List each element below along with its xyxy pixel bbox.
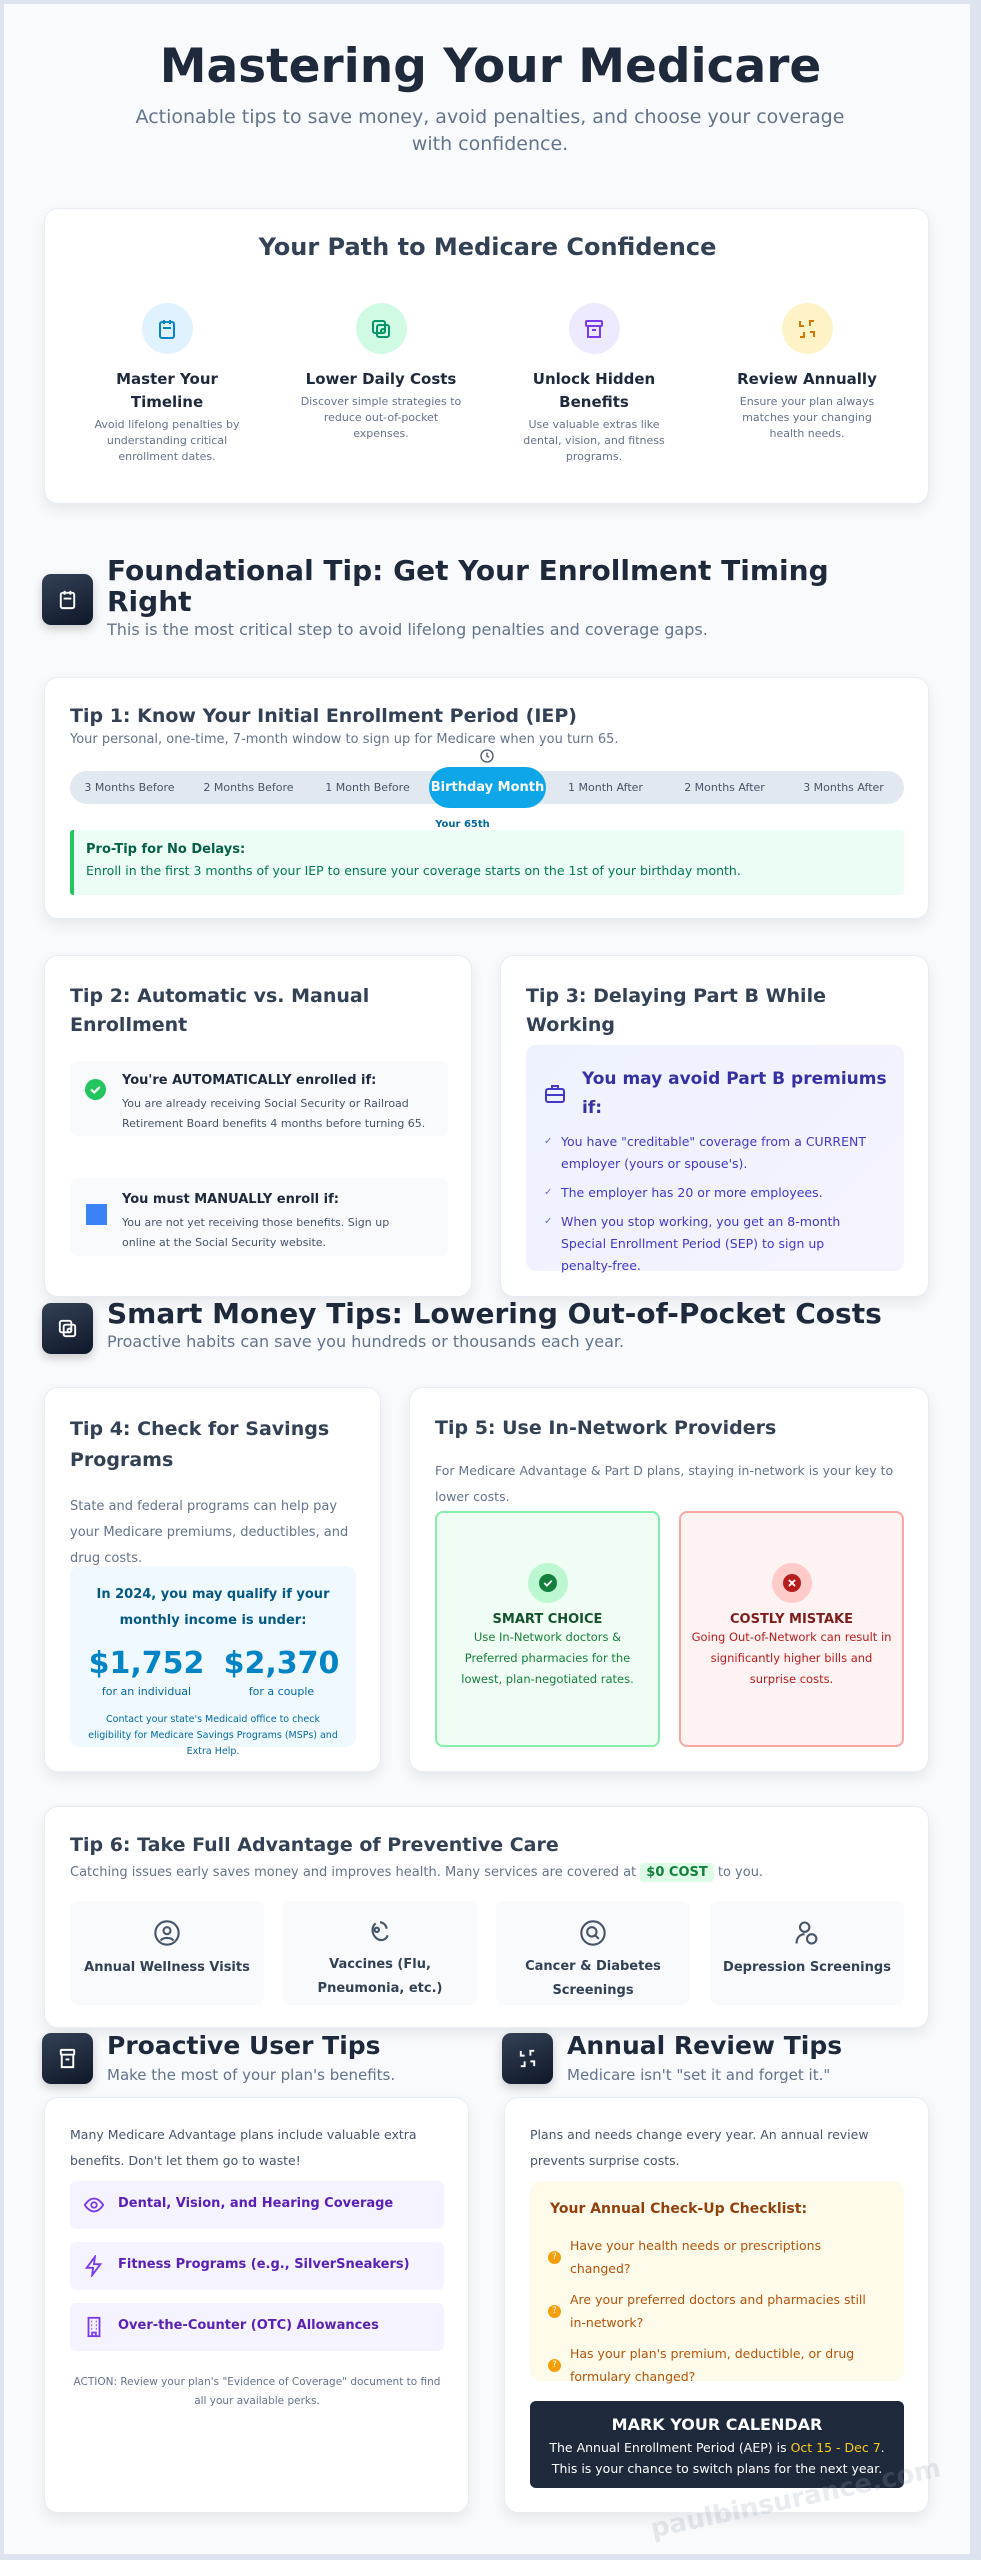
section header: foundational: This is the most critical step to avoid lifelong penalties and coverage gaps.: [107, 620, 708, 639]
icon: clock: [480, 749, 494, 763]
costly mistake: COSTLY MISTAKE: [730, 1612, 853, 1627]
item: costs: Discover simple strategies to: [301, 395, 461, 408]
panel: tip 5: For Medicare Advantage & Part D plans, staying in-network is your key to lower costs.: [435, 1463, 893, 1504]
timeline: 2 Months After: [684, 781, 765, 794]
panel: tip 1: [44, 677, 929, 919]
panel: tip 2: Tip 2: Automatic vs. Manual Enrollment: [70, 985, 369, 1036]
checklist: Your Annual Check-Up Checklist:: [550, 2201, 807, 2217]
icon: calendar: [42, 574, 93, 625]
timeline: 2 Months Before: [203, 781, 294, 794]
manual box: You are not yet receiving those benefits. Sign up online at the Social Security website.: [122, 1216, 389, 1249]
icon: arrows: [502, 2033, 553, 2084]
item: timeline: understanding critical: [107, 434, 227, 447]
panel: tip 1: Tip 1: Know Your Initial Enrollment Period (IEP): [70, 705, 577, 727]
callout: avoid premiums: ✓: [544, 1187, 552, 1198]
service: depression: [710, 1901, 904, 2005]
icon: check: [528, 1563, 568, 1603]
title: Mastering Your Medicare: [160, 39, 821, 94]
item: review: health needs.: [769, 427, 845, 440]
icon: calendar: [142, 303, 192, 354]
income box: $2,370: [224, 1646, 339, 1681]
panel: tip 6: [44, 1806, 929, 2028]
section header: foundational: Foundational Tip: Get Your Enrollment Timing Right: [107, 554, 829, 618]
callout: avoid premiums: [526, 1045, 904, 1271]
income box: for an individual: [102, 1685, 191, 1698]
panel: tip 5: [409, 1387, 929, 1772]
item: timeline: Timeline: [131, 393, 203, 411]
perk: fitness: [70, 2242, 444, 2290]
service: screenings: Cancer & Diabetes: [525, 1959, 661, 1974]
item: timeline: Avoid lifelong penalties by: [94, 418, 240, 431]
birthday month pill: [429, 767, 546, 808]
panel: tip 3: [500, 955, 929, 1297]
panel: tip 6: Tip 6: Take Full Advantage of Preventive Care: [70, 1834, 559, 1856]
icon: box: [568, 303, 620, 354]
item: costs: Lower Daily Costs: [306, 370, 456, 388]
pro-tip callout: Enroll in the first 3 months of your IEP to ensure your coverage starts on the 1st of your birthday month.: [86, 863, 741, 878]
item: timeline: Master Your: [116, 370, 218, 388]
income box: In 2024, you may qualify if your: [96, 1587, 329, 1602]
callout: avoid premiums: ✓: [544, 1136, 552, 1147]
icon: briefcase: [545, 1085, 565, 1103]
costly mistake: [679, 1511, 904, 1747]
perk: dental: [70, 2181, 444, 2229]
timeline: [70, 771, 904, 804]
icon: x: [772, 1563, 812, 1603]
smart choice: Use In-Network doctors & Preferred pharmacies for the lowest, plan-negotiated rates.: [461, 1630, 634, 1686]
timeline: 3 Months After: [803, 781, 884, 794]
pro-tip callout: [70, 830, 904, 895]
item: review: matches your changing: [742, 411, 872, 424]
heading: Your Path to Medicare Confidence: [259, 233, 716, 261]
income box: for a couple: [249, 1685, 314, 1698]
section header: proactive: Proactive User Tips: [107, 2031, 381, 2060]
birthday month pill: Birthday Month: [431, 780, 544, 795]
panel: tip 1: Your 65th: [435, 819, 490, 830]
service: depression: Depression Screenings: [723, 1960, 891, 1975]
item: review: Review Annually: [737, 370, 877, 388]
item: benefits: dental, vision, and fitness: [523, 434, 665, 447]
item: review: Ensure your plan always: [740, 395, 874, 408]
watermark: paulbinsurance.com: [648, 2454, 944, 2544]
service: vaccines: Vaccines (Flu,: [329, 1957, 431, 1972]
service: screenings: [496, 1901, 690, 2005]
automatic box: [70, 1061, 448, 1136]
item: timeline: [94, 303, 240, 463]
checklist: ?: [552, 2360, 557, 2370]
panel: annual review: [504, 2097, 929, 2513]
panel: annual review: Plans and needs change every year. An annual review prevents surprise costs.: [530, 2127, 869, 2168]
checklist: Are your preferred doctors and pharmacies still in-network?: [570, 2292, 866, 2330]
income box: Contact your state's Medicaid office to check eligibility for Medicare Savings Programs (MSPs) and Extra Help.: [88, 1714, 338, 1757]
icon: arrows: [782, 303, 832, 354]
smart choice: SMART CHOICE: [493, 1612, 602, 1627]
action note: ACTION: Review your plan's "Evidence of Coverage" document to find all your available perks.: [74, 2376, 440, 2407]
mark your calendar: [530, 2401, 904, 2488]
callout: avoid premiums: You may avoid Part B premiums if:: [582, 1069, 887, 1118]
item: benefits: programs.: [566, 450, 622, 463]
perk: otc: [70, 2303, 444, 2351]
checklist: ?: [552, 2252, 557, 2262]
section header: proactive: Make the most of your plan's benefits.: [107, 2066, 395, 2084]
income box: monthly income is under:: [120, 1613, 306, 1628]
income box: $1,752: [89, 1646, 204, 1681]
section header: proactive: [38, 2031, 395, 2092]
panel: proactive: [44, 2097, 469, 2513]
costly mistake: Going Out-of-Network can result in significantly higher bills and surprise costs.: [692, 1630, 891, 1686]
service: wellness: Annual Wellness Visits: [84, 1960, 250, 1975]
service: vaccines: Pneumonia, etc.): [318, 1981, 442, 1996]
checklist: Have your health needs or prescriptions changed?: [570, 2238, 821, 2276]
manual box: [70, 1178, 448, 1256]
panel: proactive: Many Medicare Advantage plans include valuable extra benefits. Don't let them go to waste!: [70, 2127, 417, 2168]
panel: tip 2: [44, 955, 472, 1297]
panel: tip 4: Tip 4: Check for Savings Programs: [70, 1418, 329, 1471]
icon: people: [795, 1922, 818, 1944]
service: wellness: [70, 1901, 264, 2005]
pro-tip callout: Pro-Tip for No Delays:: [86, 842, 245, 857]
automatic box: You're AUTOMATICALLY enrolled if:: [122, 1073, 376, 1088]
subtitle: Actionable tips to save money, avoid penalties, and choose your coverage with confidence.: [136, 106, 844, 155]
timeline: 1 Month Before: [325, 781, 410, 794]
income box: [70, 1566, 356, 1747]
panel: tip 1: Your personal, one-time, 7-month window to sign up for Medicare when you turn 65.: [70, 732, 619, 747]
item: costs: expenses.: [353, 427, 409, 440]
automatic box: You are already receiving Social Security or Railroad Retirement Board benefits 4 months before turning 65.: [122, 1097, 425, 1130]
icon: syringe: [371, 1921, 389, 1942]
checklist: ?: [552, 2306, 557, 2316]
item: review: [737, 303, 877, 440]
mark your calendar: This is your chance to switch plans for the next year.: [552, 2461, 882, 2476]
perk: fitness: Fitness Programs (e.g., SilverSneakers): [118, 2257, 410, 2272]
manual box: You must MANUALLY enroll if:: [122, 1192, 339, 1207]
icon: check: [85, 1079, 106, 1100]
icon: money: [42, 1303, 93, 1354]
mark your calendar: MARK YOUR CALENDAR: [612, 2415, 822, 2434]
item: timeline: enrollment dates.: [118, 450, 216, 463]
section header: smart money: Smart Money Tips: Lowering Out-of-Pocket Costs: [107, 1297, 882, 1330]
checklist: Has your plan's premium, deductible, or drug formulary changed?: [570, 2346, 854, 2384]
item: costs: reduce out-of-pocket: [324, 411, 438, 424]
checklist: [530, 2181, 904, 2381]
item: benefits: Benefits: [559, 393, 629, 411]
section header: smart money: [38, 1297, 882, 1362]
section header: annual review: Medicare isn't "set it and forget it.": [567, 2066, 830, 2084]
section header: annual review: Annual Review Tips: [567, 2031, 842, 2060]
section header: annual review: [498, 2031, 842, 2092]
icon: box: [42, 2033, 93, 2084]
callout: avoid premiums: You have "creditable" coverage from a CURRENT employer (yours or spouse's).: [561, 1134, 866, 1171]
callout: avoid premiums: When you stop working, you get an 8-month Special Enrollment Period (SEP) to sign up penalty-free.: [561, 1214, 840, 1273]
item: benefits: [523, 303, 665, 463]
panel: path to confidence: [44, 208, 929, 504]
mark your calendar: The Annual Enrollment Period (AEP) is Oct 15 - Dec 7.: [549, 2440, 885, 2455]
perk: dental: Dental, Vision, and Hearing Coverage: [118, 2196, 393, 2211]
item: benefits: Unlock Hidden: [533, 370, 655, 388]
icon: search: [580, 1920, 606, 1946]
icon: square: [86, 1204, 107, 1225]
timeline: 3 Months Before: [84, 781, 175, 794]
panel: tip 4: [44, 1387, 381, 1772]
callout: avoid premiums: The employer has 20 or more employees.: [561, 1185, 823, 1200]
icon: person: [154, 1920, 180, 1946]
icon: money: [356, 303, 406, 354]
service: screenings: Screenings: [552, 1983, 634, 1998]
panel: tip 6: Catching issues early saves money and improves health. Many services are covered at $0 COST to you.: [70, 1865, 763, 1880]
item: costs: [301, 303, 461, 440]
panel: tip 5: Tip 5: Use In-Network Providers: [435, 1417, 776, 1439]
section header: smart money: Proactive habits can save you hundreds or thousands each year.: [107, 1332, 624, 1351]
callout: avoid premiums: ✓: [544, 1216, 552, 1227]
service: vaccines: [283, 1901, 477, 2005]
panel: tip 3: Tip 3: Delaying Part B While Working: [526, 985, 826, 1036]
perk: otc: Over-the-Counter (OTC) Allowances: [118, 2318, 379, 2333]
smart choice: [435, 1511, 660, 1747]
timeline: 1 Month After: [568, 781, 643, 794]
section header: foundational: [38, 554, 829, 639]
item: benefits: Use valuable extras like: [528, 418, 660, 431]
panel: tip 4: State and federal programs can help pay your Medicare premiums, deductibles, and drug costs.: [70, 1499, 348, 1566]
